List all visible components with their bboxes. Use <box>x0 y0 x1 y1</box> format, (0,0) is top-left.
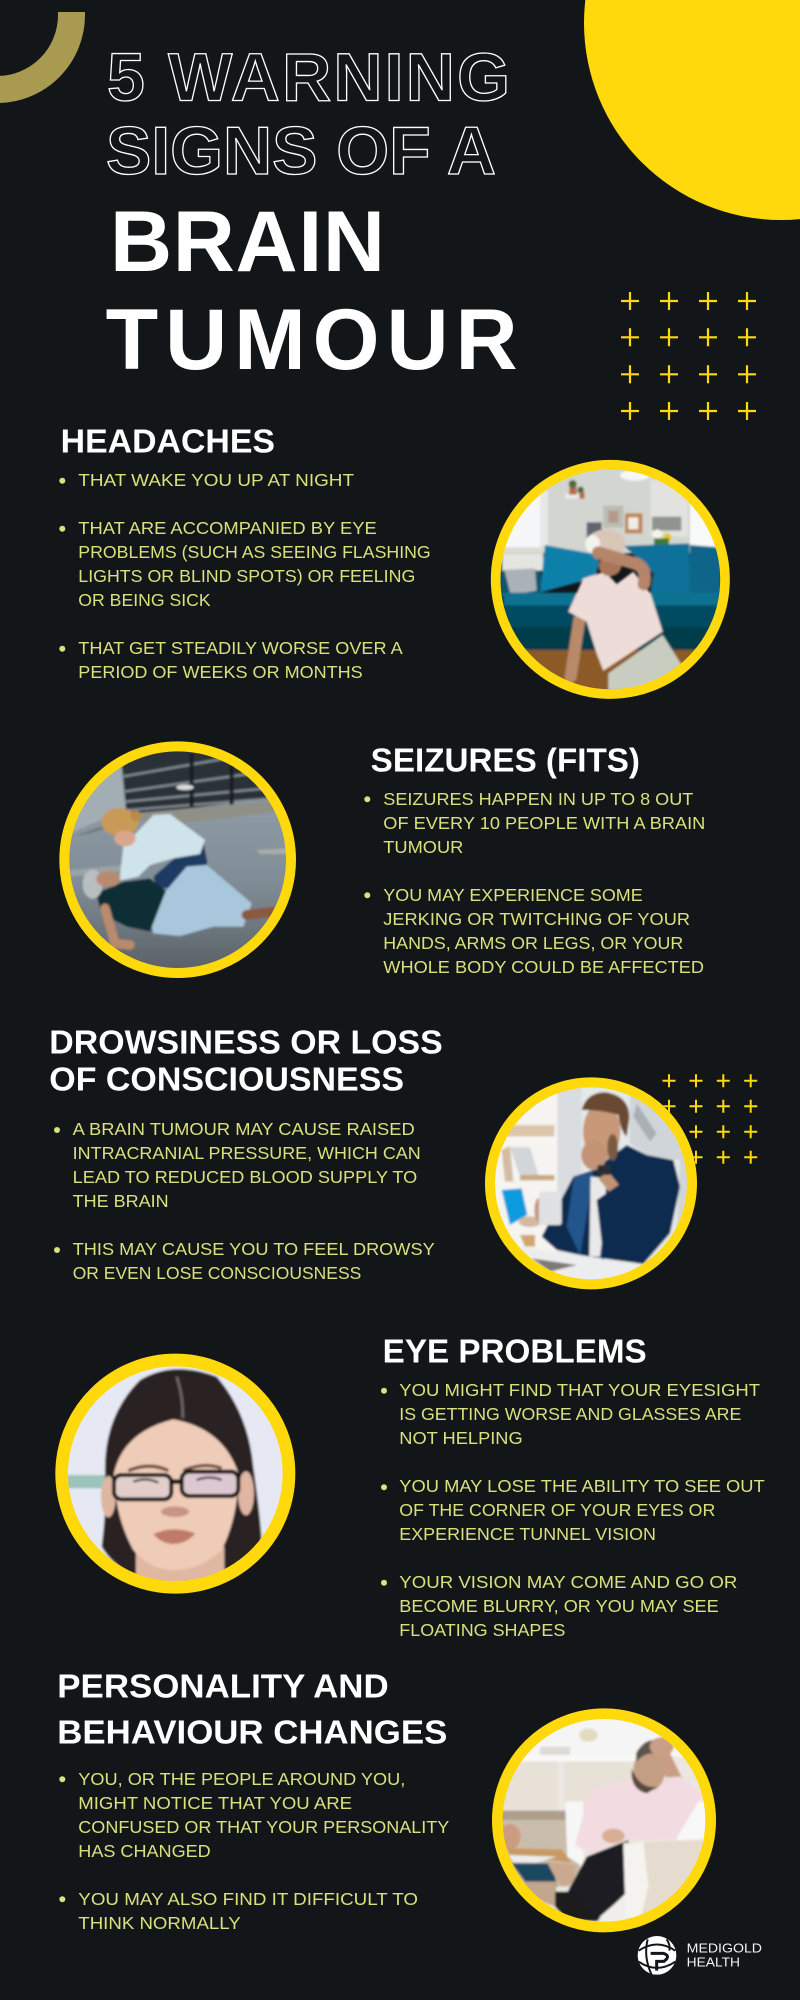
bullet: 8 out of 10: TUMOUR <box>383 837 463 857</box>
heading: seizures: SEIZURES (FITS) <box>371 741 640 778</box>
bullet: jerking or twitching: HANDS, ARMS OR LEGS, OR YOUR <box>383 933 683 953</box>
bullet: think normally: YOU MAY ALSO FIND IT DIFFICULT TO <box>78 1889 418 1909</box>
title <box>106 40 518 388</box>
bullet: think normally: THINK NORMALLY <box>78 1913 241 1933</box>
photo ring <box>62 1360 289 1587</box>
bullet: blurry vision: FLOATING SHAPES <box>399 1620 565 1640</box>
bullet: blurry vision: BECOME BLURRY, OR YOU MAY SEE <box>399 1596 719 1616</box>
heading: drowsiness: DROWSINESS OR LOSS <box>49 1024 443 1061</box>
logo: Medigold Health <box>638 1936 762 1975</box>
bullet: 8 out of 10 <box>364 789 705 857</box>
bullet: intracranial pressure <box>54 1119 421 1211</box>
bullet: feel drowsy: OR EVEN LOSE CONSCIOUSNESS <box>73 1263 361 1283</box>
bullet: jerking or twitching: JERKING OR TWITCHING OF YOUR <box>383 909 690 929</box>
panel: eye problems <box>381 1332 765 1640</box>
title: 5 WARNING <box>107 40 510 116</box>
bullet: blurry vision <box>381 1572 737 1640</box>
panel: headaches <box>59 423 431 682</box>
bullet: steadily worse: THAT GET STEADILY WORSE OVER A <box>78 638 403 658</box>
bullet: feel drowsy: THIS MAY CAUSE YOU TO FEEL DROWSY <box>73 1239 435 1259</box>
photo ring <box>64 746 291 973</box>
logo wordmark: MEDIGOLD <box>687 1941 762 1956</box>
heading: personality: PERSONALITY AND <box>57 1667 389 1704</box>
photo: woman helping a collapsed person <box>63 746 293 977</box>
panel: seizures <box>364 741 705 977</box>
title: BRAIN <box>110 194 385 290</box>
bullet: think normally <box>59 1889 418 1933</box>
bullet: jerking or twitching: WHOLE BODY COULD BE AFFECTED <box>383 957 704 977</box>
plus grid behind yawning man photo <box>662 1074 757 1164</box>
photo ring <box>496 465 725 694</box>
bullet: confused: CONFUSED OR THAT YOUR PERSONALITY <box>78 1817 450 1837</box>
heading: personality <box>57 1667 447 1750</box>
heading: drowsiness <box>49 1024 443 1097</box>
bullet: jerking or twitching <box>364 885 704 977</box>
bullet: jerking or twitching: YOU MAY EXPERIENCE SOME <box>383 885 643 905</box>
bullet: tunnel vision: YOU MAY LOSE THE ABILITY TO SEE OUT <box>399 1476 765 1496</box>
photo: woman squinting through glasses <box>62 1360 290 1587</box>
bullet: 8 out of 10: OF EVERY 10 PEOPLE WITH A BRAIN <box>383 813 705 833</box>
heading: headaches: HEADACHES <box>61 423 275 460</box>
bullet: intracranial pressure: LEAD TO REDUCED BLOOD SUPPLY TO <box>73 1167 417 1187</box>
bullet: eye problems or sickness: THAT ARE ACCOMPANIED BY EYE <box>78 518 377 538</box>
bullet: wake at night: THAT WAKE YOU UP AT NIGHT <box>78 470 354 490</box>
photo: woman on the floor holding her head <box>496 465 727 700</box>
bullet: 8 out of 10: SEIZURES HAPPEN IN UP TO 8 OUT <box>383 789 694 809</box>
bullet: tunnel vision: EXPERIENCE TUNNEL VISION <box>399 1524 656 1544</box>
title: SIGNS OF A <box>106 113 496 189</box>
bullet: feel drowsy <box>54 1239 435 1283</box>
decorative yellow circle top right <box>584 0 800 220</box>
panel: personality and behaviour <box>57 1667 450 1933</box>
bullet: eyesight worse <box>381 1380 760 1448</box>
photo: man yawning at his desk <box>485 1077 697 1290</box>
heading: drowsiness: OF CONSCIOUSNESS <box>49 1060 404 1097</box>
bullet: eye problems or sickness: LIGHTS OR BLIND SPOTS) OR FEELING <box>78 566 415 586</box>
heading: personality: BEHAVIOUR CHANGES <box>57 1713 447 1750</box>
bullet: eye problems or sickness: OR BEING SICK <box>78 590 211 610</box>
bullet: eye problems or sickness: PROBLEMS (SUCH AS SEEING FLASHING <box>78 542 431 562</box>
gold arc top left <box>0 0 72 90</box>
bullet: eyesight worse: IS GETTING WORSE AND GLASSES ARE <box>399 1404 741 1424</box>
logo wordmark <box>687 1941 762 1970</box>
bullet: eyesight worse: YOU MIGHT FIND THAT YOUR EYESIGHT <box>399 1380 760 1400</box>
bullet: tunnel vision: OF THE CORNER OF YOUR EYES OR <box>399 1500 715 1520</box>
bullet: eye problems or sickness <box>59 518 431 610</box>
bullet: tunnel vision <box>381 1476 765 1544</box>
logo wordmark: HEALTH <box>687 1955 740 1970</box>
bullet: steadily worse: PERIOD OF WEEKS OR MONTHS <box>78 662 363 682</box>
bullet: blurry vision: YOUR VISION MAY COME AND GO OR <box>399 1572 737 1592</box>
bullet: eyesight worse: NOT HELPING <box>399 1428 523 1448</box>
panel: drowsiness <box>49 1024 443 1283</box>
bullet: confused: YOU, OR THE PEOPLE AROUND YOU, <box>78 1769 405 1789</box>
bullet: intracranial pressure: THE BRAIN <box>73 1191 169 1211</box>
bullet: confused: HAS CHANGED <box>78 1841 211 1861</box>
bullet: steadily worse <box>59 638 403 682</box>
photo ring <box>497 1714 711 1927</box>
title: TUMOUR <box>106 292 518 388</box>
bullet: intracranial pressure: INTRACRANIAL PRESSURE, WHICH CAN <box>73 1143 421 1163</box>
bullet: confused <box>59 1769 450 1861</box>
plus grid top <box>621 292 756 420</box>
heading: eye problems: EYE PROBLEMS <box>383 1332 647 1369</box>
photo ring <box>490 1082 692 1284</box>
logo icon <box>638 1936 676 1975</box>
bullet: intracranial pressure: A BRAIN TUMOUR MAY CAUSE RAISED <box>73 1119 415 1139</box>
photo: man in therapy session <box>497 1713 713 1930</box>
bullet: confused: MIGHT NOTICE THAT YOU ARE <box>78 1793 352 1813</box>
